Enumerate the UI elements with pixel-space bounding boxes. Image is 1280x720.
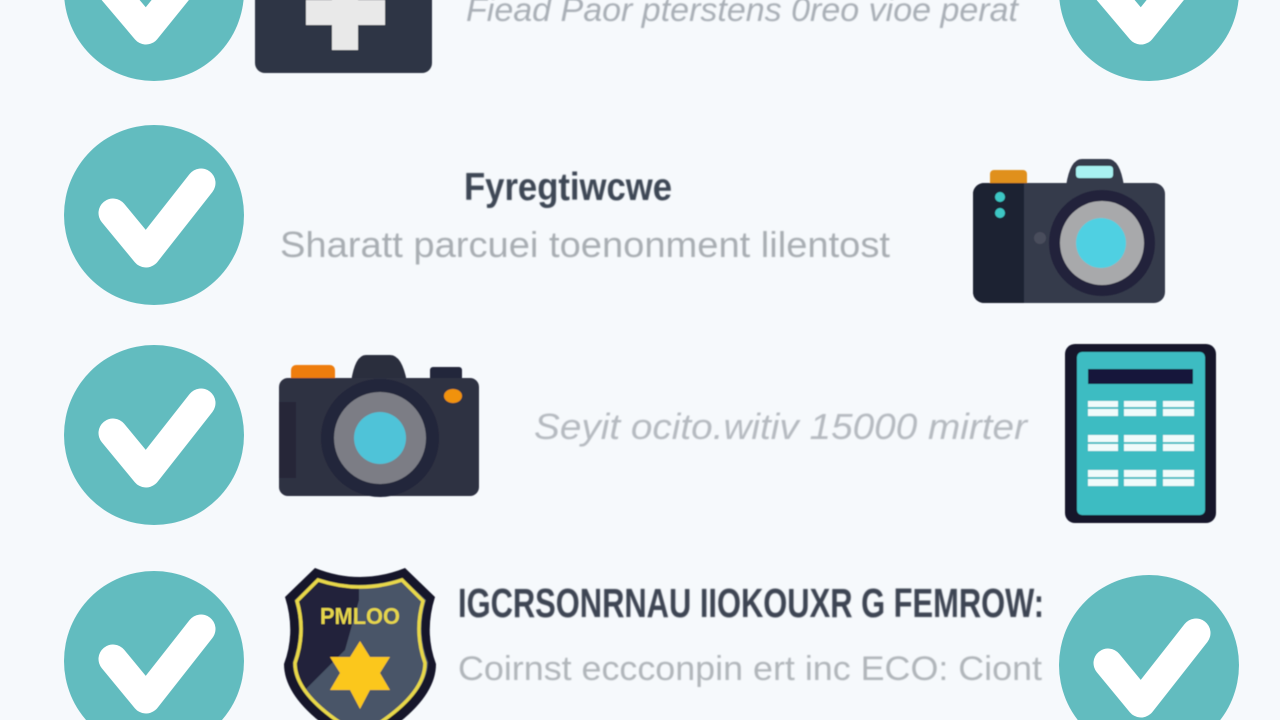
- heading: row 2: Fyregtiwcwe: [464, 166, 672, 209]
- icon: camera right: [973, 159, 1165, 303]
- icon: calculator: [1065, 344, 1216, 523]
- icon: police badge: [280, 568, 440, 720]
- icon: medical kit: [255, 0, 432, 73]
- text: row 3 description: Seyit ocito.witiv 15000 mirter: [534, 406, 1029, 447]
- check icon: left row 1: [64, 0, 244, 81]
- icon: police badge: PMLOO: [320, 603, 400, 629]
- check icon: right row 1: [1059, 0, 1239, 81]
- check icon: left row 3: [64, 345, 244, 525]
- check icon: left row 4: [64, 571, 244, 720]
- icon: camera left: [279, 355, 479, 497]
- check icon: right row 4: [1059, 575, 1239, 720]
- heading: row 4: IGCRSONRNAU IIOKOUXR G FEMROW:: [458, 580, 1044, 626]
- text: row 4 description: Coirnst eccconpin ert inc ECO: Ciont: [458, 650, 1043, 688]
- text: row 2 description: Sharatt parcuei toenonment lilentost: [280, 224, 890, 265]
- check icon: left row 2: [64, 125, 244, 305]
